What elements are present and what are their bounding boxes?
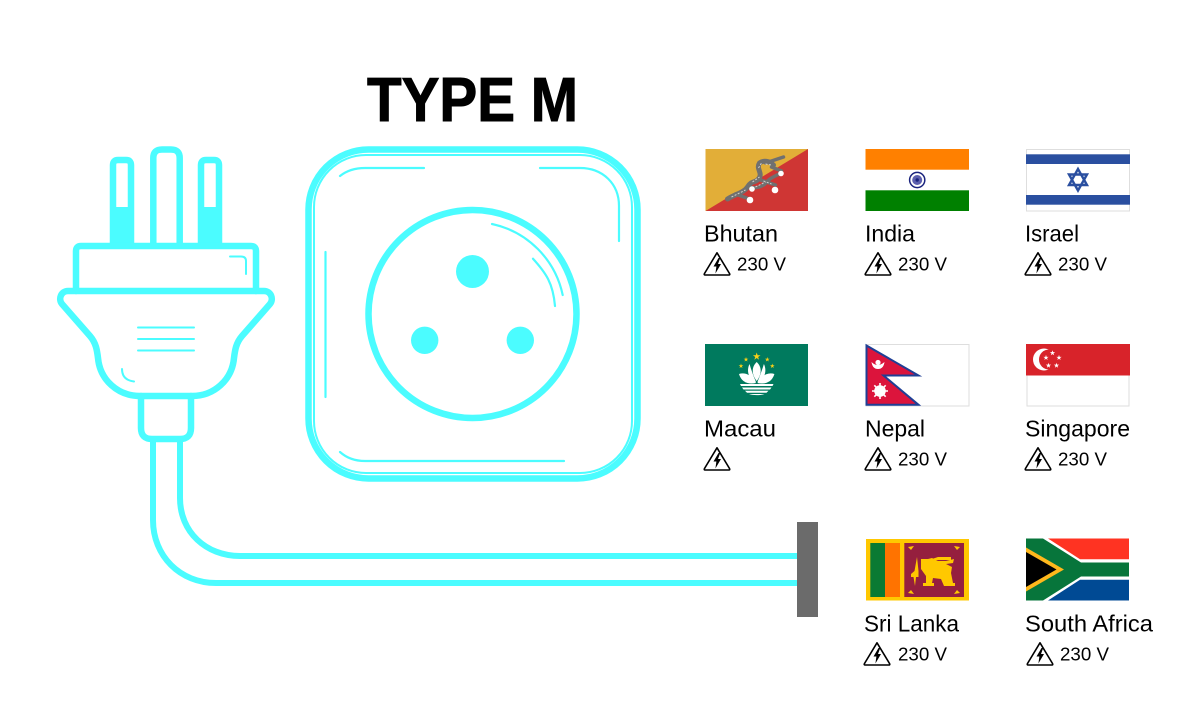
- flag: Nepal: [866, 344, 969, 406]
- country name: Israel: [1025, 220, 1079, 246]
- ring highlights: [492, 224, 563, 306]
- country name: Singapore: [1025, 416, 1130, 442]
- icon: voltage warning: [865, 253, 891, 275]
- voltage: 230 V: [1058, 254, 1108, 274]
- socket holes: [411, 255, 534, 354]
- country name: Macau: [704, 416, 776, 442]
- card: India: [865, 149, 969, 275]
- left pin: [110, 160, 134, 245]
- card: Singapore: [1025, 344, 1130, 470]
- socket inner frame: [314, 155, 632, 473]
- icon: voltage warning: [1025, 253, 1051, 275]
- card: South Africa: [1025, 538, 1153, 665]
- plug head: [76, 246, 256, 291]
- neck: [141, 396, 191, 439]
- flag: India: [866, 149, 969, 211]
- card: Israel: [1025, 150, 1130, 275]
- plug body: [60, 291, 272, 396]
- flag: Macau: [705, 344, 808, 406]
- country name: Nepal: [865, 416, 925, 442]
- icon: voltage warning: [704, 448, 730, 470]
- country name: Sri Lanka: [864, 610, 959, 636]
- flag: Singapore: [1026, 344, 1130, 406]
- voltage: 230 V: [737, 254, 787, 274]
- icon: voltage warning: [864, 643, 890, 665]
- card: Macau: [704, 344, 808, 470]
- voltage: 230 V: [898, 448, 948, 470]
- voltage: 230 V: [898, 644, 948, 664]
- flag: Sri Lanka: [866, 539, 969, 600]
- card: Nepal: [865, 344, 969, 470]
- socket ring: [368, 210, 576, 418]
- icon: voltage warning: [1025, 448, 1051, 470]
- icon: voltage warning: [704, 253, 730, 275]
- socket outer frame: [308, 150, 638, 478]
- voltage: 230 V: [898, 254, 948, 274]
- icon: plug: [60, 150, 272, 439]
- body grip lines: [122, 256, 246, 382]
- title: TYPE M: [367, 66, 578, 135]
- voltage: 230 V: [1058, 448, 1108, 470]
- icon: voltage warning: [1027, 643, 1053, 665]
- voltage: 230 V: [1060, 644, 1110, 664]
- flag: Israel: [1026, 150, 1130, 211]
- country name: India: [865, 220, 915, 246]
- card: Sri Lanka: [864, 539, 969, 665]
- centre pin: [153, 150, 180, 245]
- flag: South Africa: [1026, 538, 1129, 600]
- country name: Bhutan: [704, 220, 778, 246]
- icon: voltage warning: [865, 448, 891, 470]
- cable end connector: [797, 522, 818, 617]
- cable: [153, 438, 798, 583]
- country name: South Africa: [1025, 610, 1153, 636]
- socket highlights: [326, 168, 619, 461]
- icon: socket: [308, 150, 638, 478]
- card: Bhutan: [704, 149, 808, 275]
- right pin: [198, 160, 222, 245]
- flag: Bhutan: [706, 149, 808, 211]
